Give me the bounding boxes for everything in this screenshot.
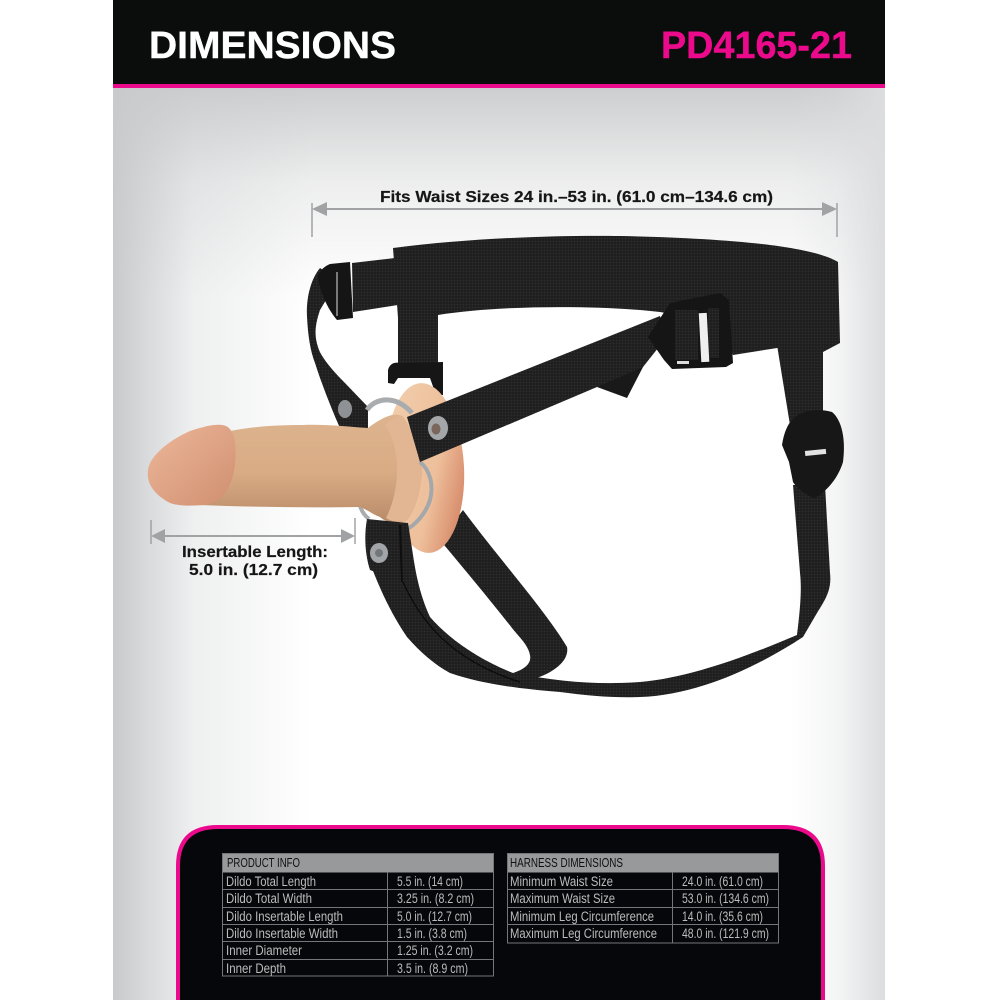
insertable length callout xyxy=(151,518,355,579)
diagonal front strap xyxy=(407,316,666,462)
table: harness dimensions: 24.0 in. (61.0 cm) xyxy=(682,874,763,889)
table: product info xyxy=(222,854,494,976)
top rivet xyxy=(428,416,448,440)
front waist buckle xyxy=(648,293,733,369)
right vertical strap xyxy=(777,345,823,425)
rear leg strap loop xyxy=(440,510,567,680)
header bar xyxy=(113,0,885,88)
waist dimension callout xyxy=(312,189,837,237)
base disc xyxy=(382,381,468,555)
centre lower buckle xyxy=(388,362,443,395)
shaft xyxy=(200,415,422,523)
table: product info: Inner Diameter xyxy=(226,943,302,958)
table: harness dimensions: 14.0 in. (35.6 cm) xyxy=(682,909,763,924)
metal ring front xyxy=(404,462,432,531)
table: harness dimensions xyxy=(507,854,778,943)
waistband xyxy=(393,236,840,355)
table: product info: Inner Depth xyxy=(226,961,286,976)
table: product info: PRODUCT INFO xyxy=(227,856,300,870)
right buckle xyxy=(782,410,844,498)
product code: PD4165-21 xyxy=(661,25,852,67)
left buckle xyxy=(318,262,353,320)
left rear strap with rivet xyxy=(307,268,368,428)
harness straps xyxy=(307,236,844,697)
metal ring back xyxy=(367,400,412,413)
table: harness dimensions: Maximum Waist Size xyxy=(510,891,615,906)
table: product info: 3.5 in. (8.9 cm) xyxy=(397,961,468,976)
specifications panel xyxy=(178,827,823,1000)
title: DIMENSIONS xyxy=(149,25,396,67)
insertable length callout: 5.0 in. (12.7 cm) xyxy=(189,562,318,579)
table: product info: 5.5 in. (14 cm) xyxy=(397,874,463,889)
insertable length callout: Insertable Length: xyxy=(182,544,328,561)
waist dimension callout: Fits Waist Sizes 24 in.–53 in. (61.0 cm–134.6 cm) xyxy=(380,189,773,206)
table: product info: 3.25 in. (8.2 cm) xyxy=(397,891,474,906)
table: harness dimensions: 48.0 in. (121.9 cm) xyxy=(682,926,769,941)
table: product info: 1.25 in. (3.2 cm) xyxy=(397,943,473,958)
left rivet xyxy=(338,400,352,418)
table: product info: Dildo Total Width xyxy=(226,891,312,906)
table: harness dimensions: Minimum Leg Circumference xyxy=(510,909,654,924)
head xyxy=(148,425,236,506)
left upper strap xyxy=(352,258,398,312)
table: product info: Dildo Insertable Width xyxy=(226,926,338,941)
diagonal strap fold flap xyxy=(597,335,655,398)
table: harness dimensions: Minimum Waist Size xyxy=(510,874,613,889)
table: product info: 5.0 in. (12.7 cm) xyxy=(397,909,472,924)
table: product info: Dildo Total Length xyxy=(226,874,316,889)
centre vertical strap xyxy=(398,312,438,364)
page background xyxy=(113,0,885,1000)
lower rivet strap xyxy=(365,519,520,682)
base glow xyxy=(385,416,422,522)
table: product info: 1.5 in. (3.8 cm) xyxy=(397,926,467,941)
table: harness dimensions: Maximum Leg Circumference xyxy=(510,926,657,941)
front leg strap and lower band xyxy=(370,485,830,697)
product silhouette xyxy=(148,381,468,555)
table: harness dimensions: 53.0 in. (134.6 cm) xyxy=(682,891,769,906)
table: harness dimensions: HARNESS DIMENSIONS xyxy=(510,856,623,870)
table: product info: Dildo Insertable Length xyxy=(226,909,343,924)
